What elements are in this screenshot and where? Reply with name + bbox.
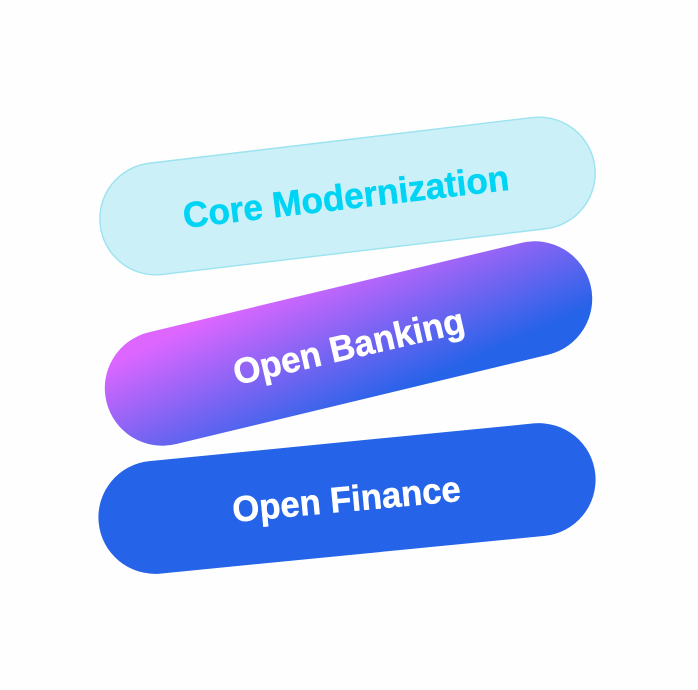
pill: Open Banking xyxy=(93,229,604,458)
pill: Core Modernization xyxy=(94,111,601,281)
label: Open Banking: Open Banking xyxy=(229,300,468,393)
label: Open Finance: Open Finance xyxy=(230,468,462,530)
label: Core Modernization: Core Modernization xyxy=(181,157,511,236)
pill: Open Finance xyxy=(93,418,601,579)
